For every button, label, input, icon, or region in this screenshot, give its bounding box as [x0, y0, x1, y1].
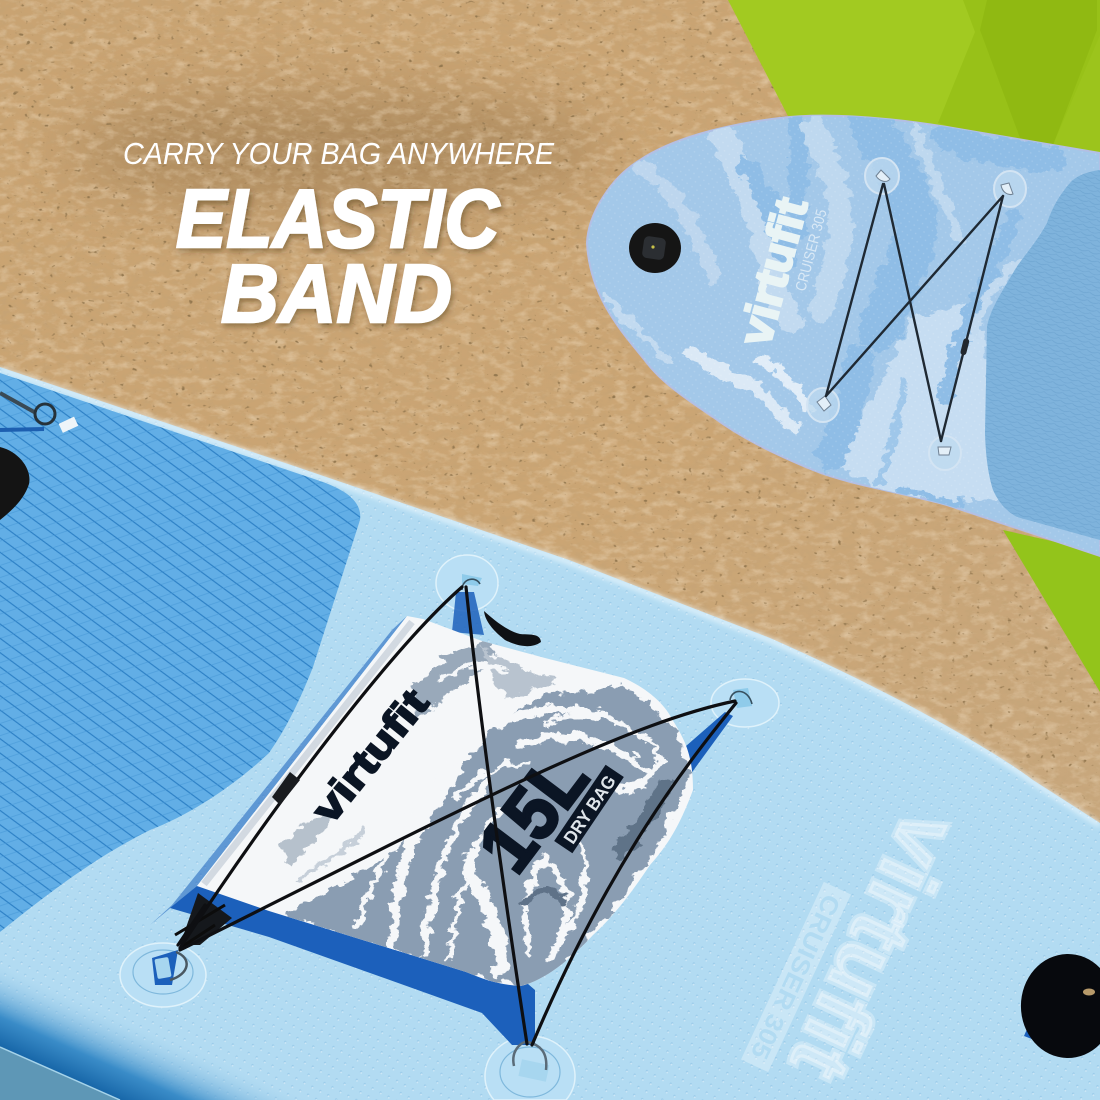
lower paddle board: [0, 367, 1100, 1100]
upper board elastic band: [826, 184, 1003, 441]
bag label dry bag: DRY BAG: [560, 772, 620, 847]
board edge highlight: [0, 369, 1100, 825]
lower elastic band: [178, 587, 736, 1045]
upper board valve: [629, 223, 681, 273]
bag logo: virtufit: [304, 681, 437, 832]
upper board logo: virtufit: [728, 192, 817, 351]
bag shadow: [150, 592, 733, 1045]
upper board D-rings: [817, 170, 1013, 455]
deck pad: [0, 373, 360, 932]
upper board anchors: [807, 158, 1026, 470]
bag lip: [204, 622, 412, 884]
lower D-rings: [152, 574, 752, 1082]
background: green panel top right: [728, 0, 1100, 170]
band clip: [272, 772, 300, 805]
upper board model label: CRUISER 305: [792, 207, 831, 293]
bag buckle: [175, 893, 232, 948]
ghost logo on board: virtufit: [772, 798, 977, 1095]
title: [176, 172, 500, 340]
subtitle: CARRY YOUR BAG ANYWHERE: [123, 136, 554, 171]
upper board deck pad: [985, 170, 1100, 540]
valve bottom right: [1021, 954, 1100, 1058]
nose hook top left: [0, 393, 78, 433]
title: BAND: [221, 247, 452, 340]
upper band clip: [960, 338, 970, 356]
title: ELASTIC: [176, 172, 500, 265]
background: green panel right: [1003, 530, 1100, 692]
ghost model label: CRUISER 305: [745, 890, 845, 1063]
bag capacity: 15L: [462, 737, 605, 887]
upper paddle board: [580, 100, 1100, 570]
anchor inner rims: [133, 950, 560, 1097]
bag marble pattern: [280, 640, 690, 990]
anchor patches: [120, 555, 779, 1100]
bag clip: [484, 611, 541, 646]
deck dark handle: [0, 447, 29, 520]
upper board marble swirl: [580, 100, 1100, 570]
dry bag: [197, 616, 693, 990]
board side shading bottom left: [0, 960, 320, 1100]
